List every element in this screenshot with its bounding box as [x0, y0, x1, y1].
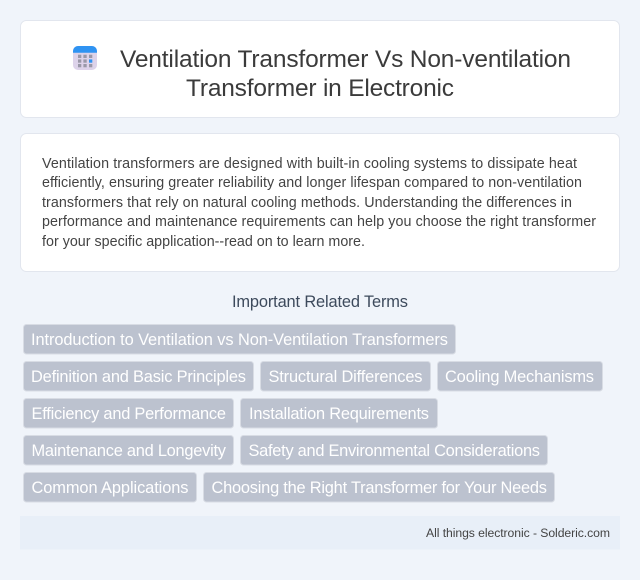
tag: installation — [240, 398, 438, 428]
heading: related terms: Important Related Terms — [232, 293, 408, 311]
title — [120, 46, 571, 102]
tag: definition — [24, 362, 254, 391]
tag: structural: Structural Differences — [268, 368, 422, 386]
intro text: efficiently, ensuring greater reliability and longer lifespan compared to non-ventilation — [42, 175, 582, 191]
intro text: for your specific application--read on to learn more. — [42, 234, 365, 250]
tag: safety — [240, 436, 548, 465]
icon: calendar grid — [73, 46, 97, 70]
intro text: performance and maintenance requirements can help you choose the right transformer — [42, 214, 596, 230]
footer bar — [20, 516, 620, 550]
tag: applications: Common Applications — [32, 479, 188, 497]
intro text: transformers that rely on natural cooling methods. Understanding the differences in — [42, 195, 572, 211]
footer text: All things electronic - Solderic.com — [426, 526, 610, 540]
tag: choosing — [204, 472, 554, 502]
tag: definition: Definition and Basic Principles — [31, 368, 246, 386]
tag: installation: Installation Requirements — [249, 405, 429, 423]
tag: safety: Safety and Environmental Considerations — [248, 442, 540, 460]
title: Ventilation Transformer Vs Non-ventilation — [120, 46, 571, 73]
intro text: Ventilation transformers are designed with built-in cooling systems to dissipate heat — [42, 156, 577, 172]
tag: introduction — [24, 324, 456, 354]
intro text — [42, 156, 596, 250]
tag: applications — [24, 472, 196, 502]
tag: choosing: Choosing the Right Transformer for Your Needs — [212, 479, 547, 497]
tag: cooling: Cooling Mechanisms — [445, 368, 594, 386]
tag: efficiency — [24, 398, 234, 428]
tag: maintenance: Maintenance and Longevity — [32, 442, 227, 460]
tag: maintenance — [24, 436, 234, 465]
tag: structural — [260, 362, 430, 391]
panel: intro card — [20, 134, 620, 272]
tag: introduction: Introduction to Ventilation vs Non-Ventilation Transformers — [31, 331, 448, 349]
title: Transformer in Electronic — [186, 75, 454, 102]
tag: efficiency: Efficiency and Performance — [32, 405, 226, 423]
panel: title card — [20, 20, 620, 118]
panel: related term tags — [24, 324, 602, 502]
tag: cooling — [438, 362, 602, 391]
